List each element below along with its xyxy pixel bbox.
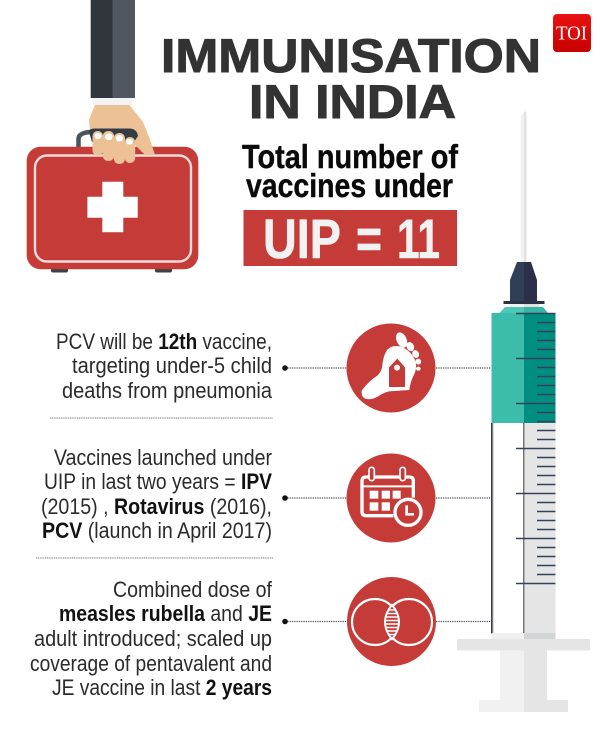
- banner: UIP = 11: [244, 207, 457, 270]
- subtitle: Total number of: [242, 138, 459, 175]
- title: IMMUNISATION: [161, 29, 541, 82]
- text block: combined dose: [30, 577, 273, 700]
- icon: calendar with clock: [346, 454, 436, 542]
- subtitle: [242, 138, 459, 204]
- medical case: [27, 132, 198, 272]
- banner: UIP = 11: =: [356, 207, 382, 270]
- syringe: [457, 110, 590, 712]
- text block: PCV 12th vaccine: [56, 329, 272, 403]
- needle: [521, 110, 526, 262]
- icon: overlapping circles with DNA strand: [347, 577, 436, 666]
- text block: vaccines launched: UIP in last two years = IPV: [44, 469, 272, 494]
- banner: UIP = 11: 11: [397, 207, 440, 270]
- logo: TOI: TOI: [556, 22, 587, 44]
- text block: combined dose: adult introduced; scaled up: [34, 626, 272, 651]
- suit sleeve: [91, 0, 135, 98]
- text block: combined dose: coverage of pentavalent and: [30, 651, 272, 676]
- section dividers: [36, 418, 273, 558]
- title: [161, 29, 541, 128]
- shirt cuff: [93, 98, 132, 105]
- cross: [87, 182, 138, 232]
- plunger: [457, 633, 590, 712]
- text block: combined dose: JE vaccine in last 2 years: [52, 675, 272, 700]
- title: IN INDIA: [249, 75, 456, 128]
- connector lines: [282, 365, 491, 624]
- text block: combined dose: measles rubella and JE: [59, 601, 272, 626]
- text block: vaccines launched: Vaccines launched under: [54, 445, 272, 470]
- text block: vaccines launched: (2015) , Rotavirus (2016),: [41, 494, 272, 519]
- hand: [89, 105, 155, 164]
- text block: PCV 12th vaccine: targeting under-5 child: [72, 353, 272, 378]
- barrel: empty: [491, 423, 556, 634]
- text block: vaccines launched: [41, 445, 272, 543]
- icon: foot with tag: [346, 324, 436, 412]
- barrel: vaccine fluid: [492, 307, 556, 423]
- text block: PCV 12th vaccine: PCV will be 12th vaccine,: [56, 329, 272, 354]
- text block: PCV 12th vaccine: deaths from pneumonia: [62, 378, 272, 403]
- logo: TOI: [553, 14, 591, 52]
- scale ticks: [516, 314, 556, 584]
- needle hub: [504, 262, 544, 307]
- banner: UIP = 11: UIP: [263, 207, 341, 270]
- subtitle: vaccines under: [246, 167, 453, 204]
- text block: vaccines launched: PCV (launch in April 2017): [42, 518, 272, 543]
- illustration: hand holding medical case: [27, 0, 198, 272]
- text block: combined dose: Combined dose of: [113, 577, 273, 602]
